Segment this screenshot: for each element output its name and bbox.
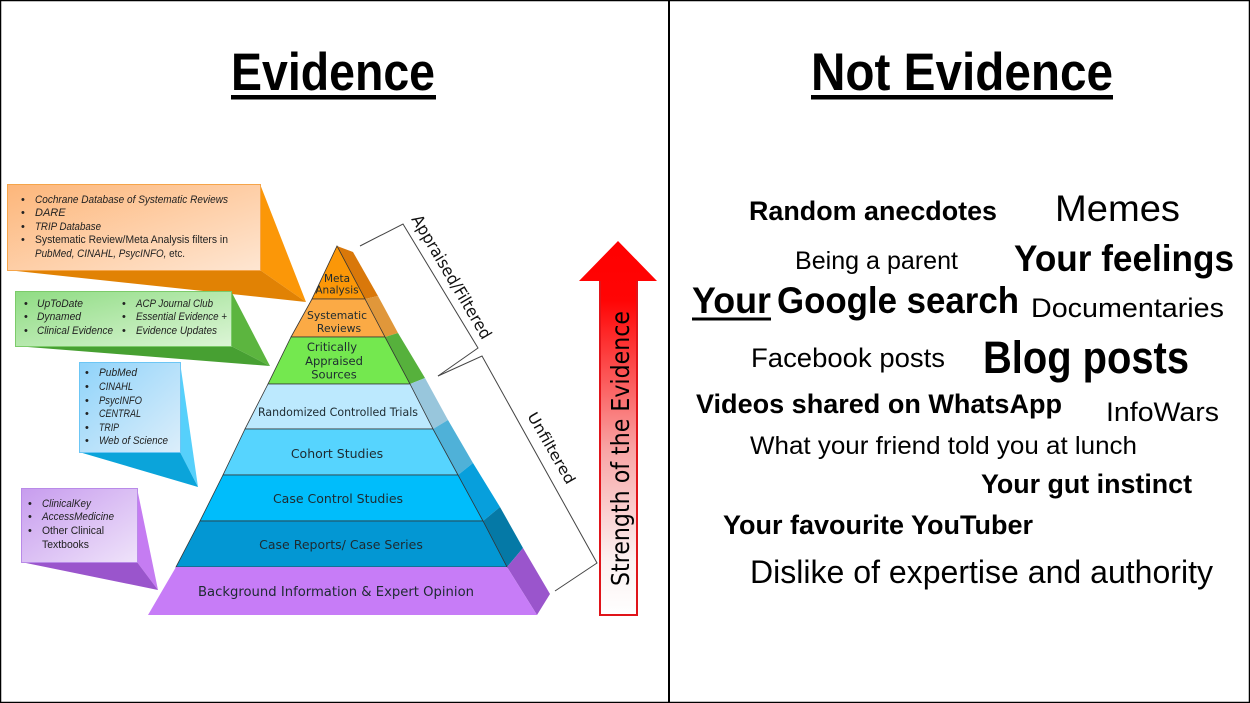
level: Critically Appraised Sources bbox=[268, 337, 410, 384]
level: Background Information bbox=[148, 567, 537, 615]
level: Systematic Reviews bbox=[291, 299, 385, 337]
callout: green pre-appraised sources: Evidence Updates bbox=[136, 325, 217, 337]
callout: green pre-appraised sources: • bbox=[24, 311, 28, 323]
callout: blue databases: CINAHL bbox=[99, 381, 133, 393]
callout: orange systematic sources: • bbox=[21, 221, 25, 233]
callout: purple textbooks: Textbooks bbox=[42, 539, 89, 551]
word: Facebook posts: Facebook posts bbox=[751, 343, 945, 373]
callout: purple textbooks: Other Clinical bbox=[42, 525, 104, 537]
word: Videos shared on WhatsApp: Videos shared on WhatsApp bbox=[696, 389, 1062, 419]
level: Cohort Studies: Cohort Studies bbox=[291, 446, 383, 461]
callout: purple textbooks: ClinicalKey bbox=[42, 498, 92, 510]
word: Your feelings: Your feelings bbox=[1014, 238, 1234, 279]
callout: green pre-appraised sources: • bbox=[122, 325, 126, 337]
callout: blue databases bbox=[79, 362, 198, 487]
callout: purple textbooks: AccessMedicine bbox=[41, 511, 114, 523]
callout: purple textbooks: • bbox=[28, 511, 32, 523]
callout: orange systematic sources bbox=[7, 184, 306, 302]
callout: green pre-appraised sources: • bbox=[24, 298, 28, 310]
level: Critically Appraised Sources: Sources bbox=[311, 368, 357, 382]
word: Your favourite YouTuber: Your favourite YouTuber bbox=[723, 510, 1033, 540]
arrow: Strength of the Evidence bbox=[579, 241, 657, 615]
level: Meta Analysis bbox=[312, 246, 365, 299]
callout: blue databases: TRIP bbox=[99, 422, 120, 434]
callout: green pre-appraised sources: • bbox=[24, 325, 28, 337]
callout: blue databases: • bbox=[85, 381, 89, 393]
word: Blog posts: Blog posts bbox=[983, 332, 1189, 383]
arrow: Strength of the Evidence: Strength of the Evidence bbox=[606, 311, 635, 586]
level: Background Information: Background Information & Expert Opinion bbox=[198, 585, 474, 600]
level: Critically Appraised Sources: Critically bbox=[307, 340, 357, 354]
level: Randomized Controlled Trials bbox=[245, 384, 433, 429]
word: InfoWars: InfoWars bbox=[1106, 397, 1219, 427]
level: Meta Analysis: Meta bbox=[324, 273, 350, 285]
callout: blue databases: Web of Science bbox=[99, 435, 168, 447]
callout: purple textbooks: • bbox=[28, 498, 32, 510]
level: Randomized Controlled Trials: Randomized Controlled Trials bbox=[258, 405, 418, 419]
callout: blue databases: CENTRAL bbox=[99, 408, 141, 420]
level: Meta Analysis: Analysis bbox=[315, 284, 359, 296]
callout: blue databases: • bbox=[85, 367, 89, 379]
callout: orange systematic sources: Cochrane Database of Systematic Reviews bbox=[35, 194, 228, 206]
bracket: Appraised/Filtered bbox=[360, 211, 495, 376]
callout: blue databases: • bbox=[85, 408, 89, 420]
callout: green pre-appraised sources: • bbox=[122, 311, 126, 323]
level: Systematic Reviews: Systematic bbox=[307, 309, 367, 322]
word: Being a parent: Being a parent bbox=[795, 247, 958, 275]
title: Evidence: Evidence bbox=[231, 43, 435, 102]
level: Critically Appraised Sources: Appraised bbox=[305, 354, 363, 368]
word: Google search: Google search bbox=[777, 280, 1019, 321]
bracket: Appraised/Filtered: Appraised/Filtered bbox=[408, 211, 495, 343]
callout: orange systematic sources: • bbox=[21, 234, 25, 246]
level: Cohort Studies bbox=[223, 429, 458, 475]
word: Random anecdotes: Random anecdotes bbox=[749, 196, 997, 226]
word: Memes: Memes bbox=[1055, 188, 1180, 229]
callout: blue databases: • bbox=[85, 395, 89, 407]
word: Your gut instinct: Your gut instinct bbox=[981, 469, 1192, 499]
level: Case Control Studies bbox=[200, 475, 483, 521]
callout: blue databases: PsycINFO bbox=[99, 395, 142, 407]
word: Your (underlined): Your bbox=[692, 280, 771, 321]
callout: purple textbooks bbox=[21, 488, 158, 590]
callout: green pre-appraised sources: UpToDate bbox=[37, 298, 83, 310]
word: What your friend told you at lunch: What your friend told you at lunch bbox=[750, 432, 1137, 460]
level: Case Control Studies: Case Control Studies bbox=[273, 491, 403, 506]
callout: blue databases: • bbox=[85, 435, 89, 447]
level: Case Reports / Case Series bbox=[176, 521, 507, 567]
callout: orange systematic sources: PubMed, CINAHL, PsycINFO, etc. bbox=[35, 248, 185, 260]
callout: green pre-appraised sources: • bbox=[122, 298, 126, 310]
level: Systematic Reviews: Reviews bbox=[317, 322, 361, 335]
callout: blue databases: PubMed bbox=[99, 367, 138, 379]
level: Case Reports / Case Series: Case Reports/ Case Series bbox=[259, 537, 423, 552]
title: Not Evidence: Not Evidence bbox=[811, 43, 1113, 102]
bracket: Unfiltered bbox=[438, 356, 597, 591]
callout: green pre-appraised sources bbox=[15, 291, 270, 366]
callout: green pre-appraised sources: Essential Evidence + bbox=[136, 311, 228, 323]
panel: evidence pyramid bbox=[148, 246, 550, 615]
word: Documentaries: Documentaries bbox=[1031, 293, 1224, 323]
callout: orange systematic sources: • bbox=[21, 194, 25, 206]
callout: green pre-appraised sources: Dynamed bbox=[37, 311, 82, 323]
callout: purple textbooks: • bbox=[28, 525, 32, 537]
callout: orange systematic sources: • bbox=[21, 207, 25, 219]
callout: green pre-appraised sources: Clinical Evidence bbox=[37, 325, 113, 337]
callout: orange systematic sources: TRIP Database bbox=[35, 221, 101, 233]
panel: not evidence word cloud bbox=[692, 188, 1234, 590]
callout: blue databases: • bbox=[85, 422, 89, 434]
word: Dislike of expertise and authority: Dislike of expertise and authority bbox=[750, 554, 1213, 590]
bracket: Unfiltered: Unfiltered bbox=[524, 409, 579, 487]
pyramid side faces bbox=[337, 246, 550, 615]
callout: green pre-appraised sources: ACP Journal Club bbox=[135, 298, 213, 310]
callout: orange systematic sources: DARE bbox=[35, 207, 66, 219]
callout: orange systematic sources: Systematic Review/Meta Analysis filters in bbox=[35, 234, 228, 246]
